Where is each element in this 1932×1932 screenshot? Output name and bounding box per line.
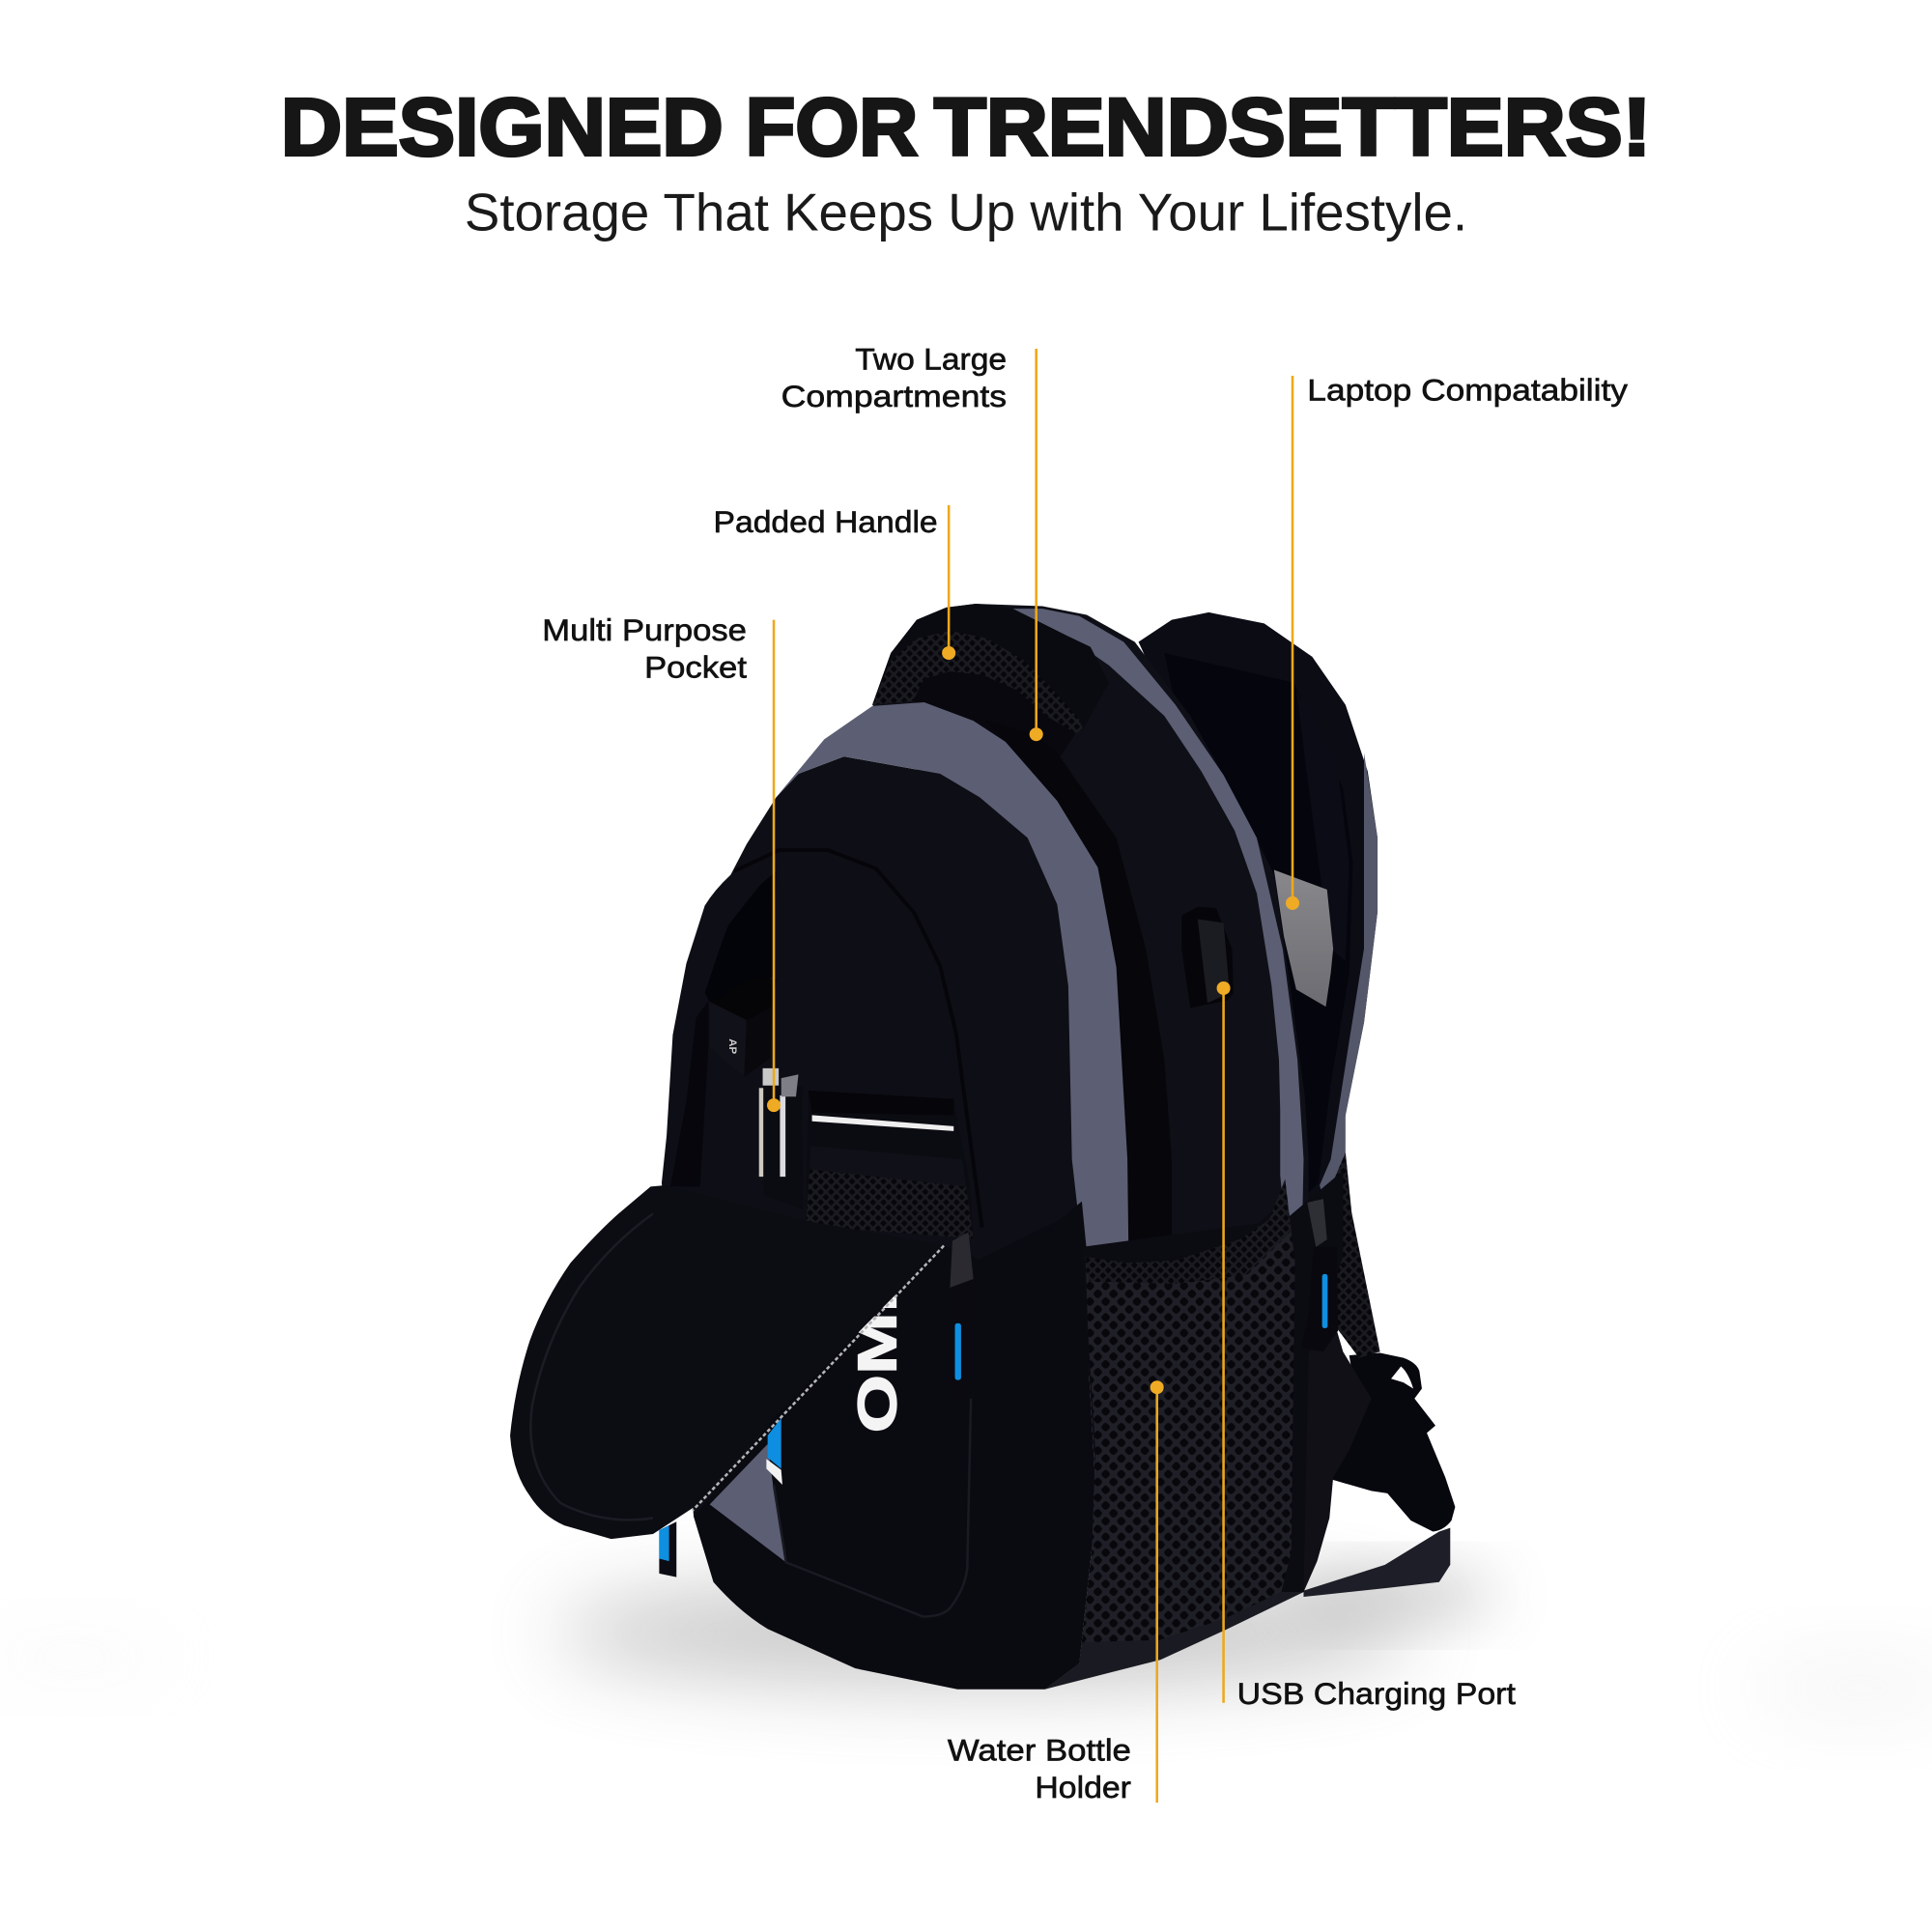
body bottom panel: [1045, 1592, 1303, 1690]
callout: multi purpose pocket: Pocket: [644, 650, 747, 685]
backpack illustration: [510, 604, 1455, 1690]
compartment grey rim: [1320, 753, 1378, 1203]
subtitle: Storage That Keeps Up with Your Lifestyle.: [465, 183, 1467, 242]
open front pocket: [670, 850, 982, 1227]
callout: laptop compatability: Laptop Compatability: [1307, 373, 1628, 408]
callout: multi purpose pocket: [542, 612, 781, 1112]
back mesh strap: [1319, 1152, 1380, 1358]
main compartment grey stripe: [1012, 609, 1303, 1226]
left lining shadow: [670, 1001, 708, 1186]
callout: water bottle holder: Holder: [1035, 1770, 1131, 1804]
pocket shadow opening: [705, 871, 777, 1002]
callout: two large compartments: Two Large: [855, 342, 1007, 377]
padded handle with mesh: [872, 604, 1109, 757]
callout: two large compartments: [781, 342, 1043, 741]
lower grey wedge and blue stripe: [710, 1418, 786, 1562]
front pocket body: [662, 756, 1084, 1589]
callout: laptop compatability: [1286, 373, 1628, 910]
zipper pull flap: [659, 1521, 676, 1577]
brand logo: OMI: [846, 1292, 907, 1433]
rear open compartment: [1139, 612, 1378, 1220]
handle mesh: [872, 631, 1083, 733]
USB port: [1181, 907, 1234, 1008]
main compartment body: [872, 604, 1309, 1269]
pens: [759, 1068, 804, 1210]
side panel: [1282, 1222, 1372, 1592]
mesh water bottle pocket: [1082, 1179, 1295, 1642]
front lower panel: [694, 1202, 1096, 1690]
title: DESIGNED: [281, 82, 724, 173]
inner pocket wall: [699, 1047, 770, 1213]
callout: multi purpose pocket: Multi Purpose: [542, 612, 747, 647]
zipper band: [985, 721, 1172, 1260]
compartment interior: [1164, 653, 1353, 1220]
zipper pull front: [948, 1233, 975, 1399]
callout: padded handle: [714, 504, 955, 660]
power bank: [710, 977, 777, 1077]
title: [281, 82, 1651, 173]
front pocket grey band: [777, 702, 1128, 1260]
callout: padded handle: Padded Handle: [714, 504, 938, 539]
callout: water bottle holder: Water Bottle: [948, 1733, 1131, 1768]
interior fabric fold: [1296, 690, 1350, 961]
title: FOR: [746, 82, 918, 173]
title: TRENDSETTERS!: [934, 82, 1651, 173]
main body lower curve: [1128, 1208, 1285, 1269]
handle top flap: [872, 604, 1109, 729]
callout: two large compartments: Compartments: [781, 379, 1007, 413]
lower strap: [1303, 1528, 1450, 1597]
front pocket lower seam: [774, 1399, 971, 1616]
base under mesh: [1045, 1171, 1343, 1690]
power bank logo: AP: [726, 1038, 738, 1055]
rear zipper pull: [1301, 1199, 1338, 1351]
callout: water bottle holder: [948, 1380, 1164, 1804]
mesh upper band: [1086, 1179, 1290, 1284]
arch seam: [734, 850, 982, 1227]
shoulder strap loop: [1324, 1353, 1455, 1531]
strap hole: [1391, 1367, 1413, 1389]
open flap: [510, 1185, 944, 1539]
under handle shadow: [913, 671, 1076, 757]
callout: usb charging port: [1217, 981, 1516, 1711]
laptop: [1274, 870, 1333, 1007]
organiser pocket: [806, 1091, 974, 1238]
floor shadow: [0, 1569, 1932, 1716]
callout: usb charging port: USB Charging Port: [1237, 1676, 1516, 1711]
